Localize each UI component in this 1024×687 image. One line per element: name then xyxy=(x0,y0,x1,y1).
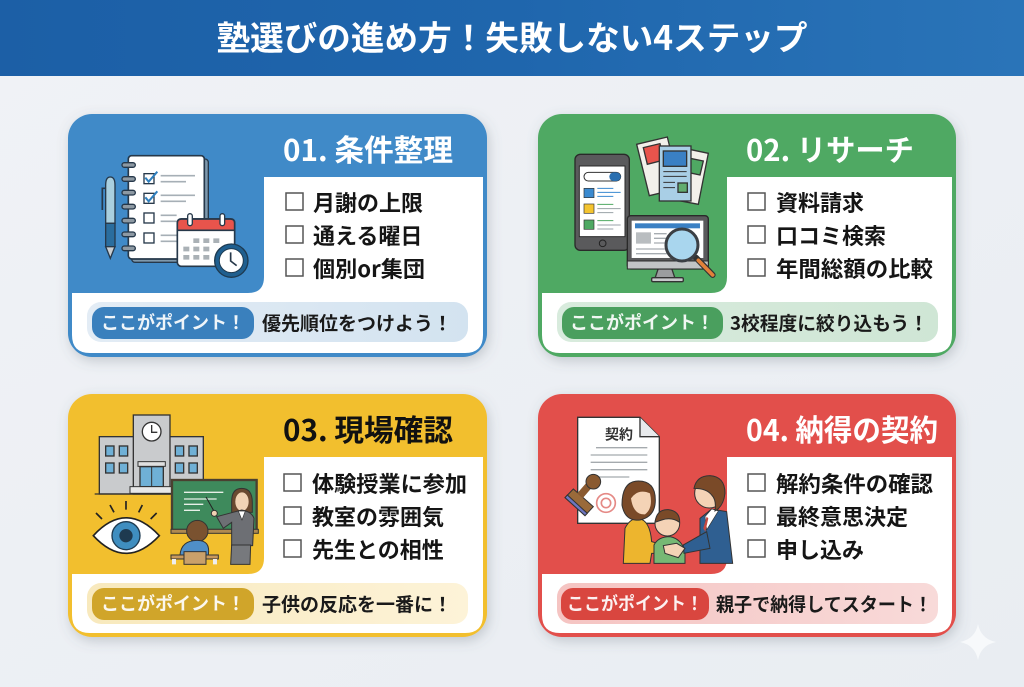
callout: step 3 point: 子供の反応を一番に！ xyxy=(262,590,452,617)
title banner xyxy=(0,0,1024,76)
checklist: step 4: 最終意思決定 xyxy=(776,500,908,532)
callout: step 1 point: ここがポイント！ xyxy=(101,309,245,335)
heading: step 2: 02. リサーチ xyxy=(746,126,914,170)
icon: contract, stamp, family handshake xyxy=(565,417,733,563)
checklist: step 2: 資料請求 xyxy=(776,186,864,218)
title banner: 塾選びの進め方！失敗しない4ステップ xyxy=(216,11,808,60)
panel: step 3 xyxy=(68,394,487,637)
callout: step 4 point: ここがポイント！ xyxy=(567,590,703,616)
callout: step 1 point xyxy=(87,302,468,342)
callout: step 4 point: 親子で納得してスタート！ xyxy=(716,590,932,617)
checklist: step 2 xyxy=(748,186,933,284)
checklist: step 2: 口コミ検索 xyxy=(776,219,886,251)
callout: step 3 point xyxy=(87,583,468,624)
checklist: step 1: 月謝の上限 xyxy=(313,186,423,218)
icon: contract, stamp, family handshake: 契約 xyxy=(605,425,633,445)
callout: step 3 point: ここがポイント！ xyxy=(101,590,245,616)
checklist: step 3: 体験授業に参加 xyxy=(312,467,467,499)
callout: step 4 point xyxy=(557,583,938,624)
callout: step 2 point xyxy=(557,302,938,342)
icon: checklist, pen, calendar and clock xyxy=(102,156,248,277)
heading: step 4: 04. 納得の契約 xyxy=(746,406,938,450)
checklist: step 4 xyxy=(748,467,933,565)
heading: step 1: 01. 条件整理 xyxy=(283,126,453,170)
checklist: step 4: 解約条件の確認 xyxy=(776,467,933,499)
panel: step 4 xyxy=(538,394,956,637)
checklist: step 1: 通える曜日 xyxy=(313,219,422,251)
icon: school, eye, classroom xyxy=(93,415,258,564)
panel: step 1 xyxy=(68,114,487,357)
checklist: step 3 xyxy=(284,467,467,565)
checklist: step 2: 年間総額の比較 xyxy=(776,252,933,284)
checklist: step 4: 申し込み xyxy=(776,533,864,565)
icon: sparkle xyxy=(960,624,996,660)
callout: step 2 point: ここがポイント！ xyxy=(570,309,714,335)
panel: step 2 xyxy=(538,114,956,357)
checklist: step 1: 個別or集団 xyxy=(313,252,425,284)
callout: step 1 point: 優先順位をつけよう！ xyxy=(262,309,452,336)
checklist: step 3: 先生との相性 xyxy=(312,533,444,565)
callout: step 2 point: 3校程度に絞り込もう！ xyxy=(730,309,928,336)
heading: step 3: 03. 現場確認 xyxy=(283,406,453,450)
checklist: step 1 xyxy=(286,186,425,284)
icon: phone, brochures, monitor and magnifier xyxy=(575,137,713,282)
checklist: step 3: 教室の雰囲気 xyxy=(312,500,444,532)
